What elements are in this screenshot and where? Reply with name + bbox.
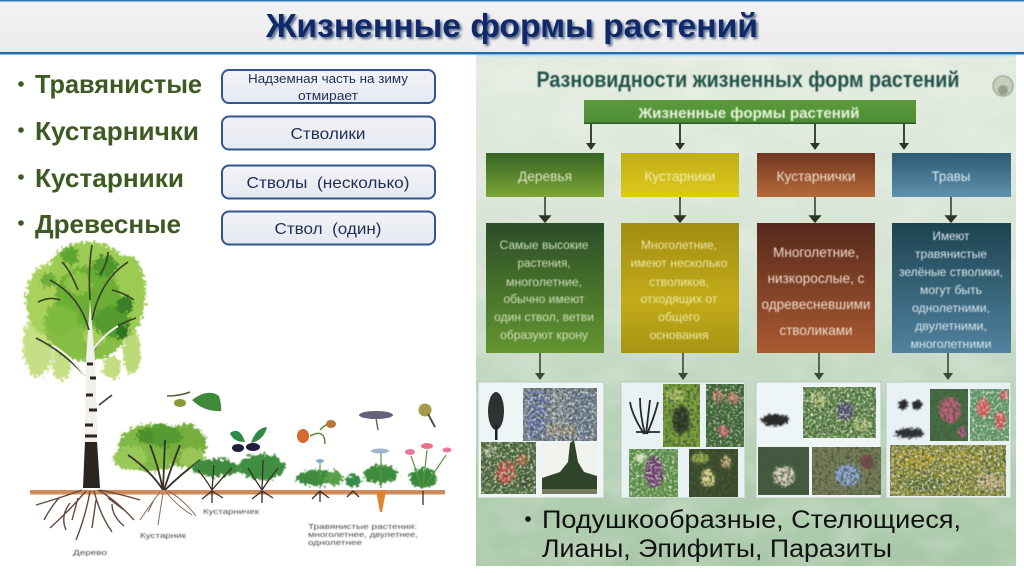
illustration captions [73, 507, 418, 557]
plant types list [18, 69, 202, 239]
description: trees: растения, [518, 258, 570, 270]
icon: herb silhouette [894, 400, 924, 438]
arrow [946, 197, 956, 222]
arrow [540, 197, 550, 222]
description: shrubs: стволиков, [649, 277, 709, 289]
photos: dwarf shrubs [756, 382, 881, 498]
plant types list: Кустарнички [35, 116, 199, 146]
description: shrubs [621, 223, 739, 353]
header: trees: Деревья [518, 168, 572, 184]
arrow [675, 197, 685, 222]
description: shrubs: отходящих от [640, 294, 718, 306]
description: grasses: многолетними [910, 339, 992, 351]
header: grasses: Травы [932, 168, 970, 184]
description: dwarf shrubs: Многолетние, [773, 244, 859, 260]
description: shrubs: основания [650, 330, 708, 342]
stem description boxes [222, 70, 435, 244]
photos: grasses [886, 382, 1011, 498]
stem description boxes: отмирает [298, 88, 358, 103]
description: shrubs: общего [658, 312, 700, 324]
illustration: plant life forms [23, 242, 452, 557]
header: grasses [892, 153, 1011, 197]
icon: dwarf shrubs [192, 454, 285, 503]
header: shrubs: Кустарники [644, 168, 716, 184]
photos: shrubs [621, 382, 745, 498]
icon: herbaceous plants [296, 443, 452, 512]
stem description boxes: Ствол (один) [274, 221, 382, 238]
description: dwarf shrubs: низкорослые, с [768, 270, 864, 286]
icon: fruit [418, 404, 435, 427]
arrows: root to categories [586, 124, 909, 150]
column: grasses [892, 153, 1011, 353]
ground line [30, 490, 445, 494]
header: shrubs [621, 153, 739, 197]
description: shrubs: имеют несколько [630, 258, 728, 270]
illustration captions: Кустарничек [203, 507, 260, 516]
arrows: descriptions to photos [535, 353, 953, 380]
description: grasses: двулетними, [915, 321, 987, 333]
icon: shrub [113, 424, 206, 525]
header: dwarf shrubs: Кустарнички [776, 168, 856, 184]
column: dwarf shrubs [757, 153, 875, 353]
description: grasses: Имеют [932, 231, 970, 243]
description: grasses: травянистые [915, 249, 987, 261]
description: trees: обычно имеют [504, 294, 585, 306]
bullet text: other life forms [525, 506, 961, 563]
description: trees [486, 223, 604, 353]
description: grasses: зелёные стволики, [899, 267, 1003, 279]
photos: trees [478, 382, 604, 498]
header: trees [486, 153, 604, 197]
icon: berries [230, 427, 267, 452]
illustration captions: Кустарник [140, 531, 187, 540]
column: trees [486, 153, 604, 353]
icon: wild strawberry [297, 420, 336, 444]
description: shrubs: Многолетние, [641, 240, 717, 252]
bullet text: other life forms: Лианы, Эпифиты, Паразиты [542, 535, 892, 563]
illustration captions: однолетнее [308, 538, 362, 547]
description: trees: один ствол, ветви [494, 312, 594, 324]
plant types list: Травянистые [35, 69, 202, 99]
icon: umbel flower [359, 411, 393, 430]
icon: catkin leaf [167, 392, 221, 411]
icon: tree silhouette [488, 392, 504, 440]
description: grasses [892, 223, 1011, 353]
description: grasses: могут быть [920, 285, 982, 297]
icon: tree (birch) [23, 242, 146, 540]
stem description boxes: Стволы (несколько) [246, 175, 410, 192]
description: trees: образуют крону [500, 330, 588, 342]
illustration captions: Травянистые растения: [308, 522, 417, 531]
title bar [0, 0, 1024, 54]
chart root box: Жизненные формы растений [637, 105, 860, 122]
plant types list: Кустарники [35, 163, 184, 193]
panel: varieties of plant life forms [476, 55, 1016, 566]
illustration captions: Дерево [73, 548, 107, 557]
description: trees: Самые высокие [500, 240, 588, 252]
stem description boxes: Стволики [290, 126, 366, 143]
icon: dwarf shrub silhouette [761, 414, 789, 426]
description: dwarf shrubs: одревесневшими [762, 296, 870, 312]
arrow [810, 197, 820, 222]
panel heading: Разновидности жизненных форм растений [536, 67, 960, 92]
plant types list: Древесные [35, 209, 181, 239]
description: trees: многолетние, [506, 277, 582, 289]
icon: shrub silhouette [630, 398, 660, 434]
description: grasses: однолетними, [912, 303, 990, 315]
illustration captions: многолетнее, двулетнее, [308, 530, 418, 539]
description: dwarf shrubs [757, 223, 875, 353]
header: dwarf shrubs [757, 153, 875, 197]
stem description boxes: Надземная часть на зиму [248, 71, 409, 86]
description: dwarf shrubs: стволиками [780, 322, 852, 338]
column: shrubs [621, 153, 739, 353]
chart root box [584, 100, 916, 124]
title bar: Жизненные формы растений [267, 9, 760, 46]
title: Жизненные формы растений [265, 7, 758, 44]
bullet text: other life forms: Подушкообразные, Стелющиеся, [542, 506, 961, 534]
icon: emblem [993, 76, 1013, 96]
